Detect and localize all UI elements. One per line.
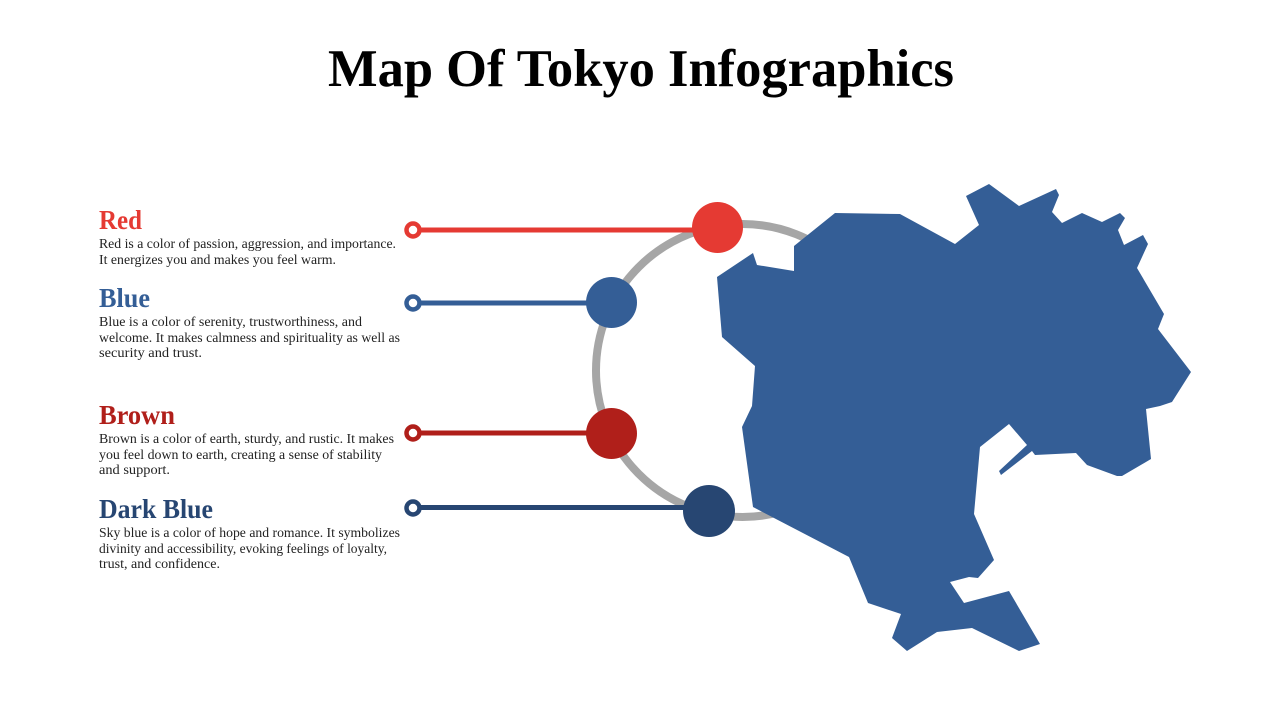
text block: brown: you feel down to earth, creating a sense of stability bbox=[99, 448, 382, 463]
text block: brown: and support. bbox=[99, 463, 170, 478]
text block: dark blue: Dark Blue bbox=[99, 494, 213, 524]
connector: blue bbox=[406, 277, 637, 328]
text block: red: It energizes you and makes you feel warm. bbox=[99, 253, 336, 268]
connector: brown bbox=[406, 408, 637, 459]
title: Map Of Tokyo Infographics bbox=[328, 40, 954, 98]
text block: dark blue bbox=[99, 494, 400, 572]
text block: blue bbox=[99, 283, 400, 361]
connector: red bbox=[406, 202, 743, 253]
map of Tokyo bbox=[717, 184, 1191, 651]
text block: blue: Blue is a color of serenity, trustworthiness, and bbox=[99, 315, 362, 330]
ring bbox=[596, 224, 889, 517]
text block: brown: Brown bbox=[99, 400, 175, 430]
text block: dark blue: trust, and confidence. bbox=[99, 557, 220, 572]
text block: red bbox=[99, 205, 396, 268]
text block: brown bbox=[99, 400, 394, 478]
text block: red: Red is a color of passion, aggression, and importance. bbox=[99, 237, 396, 252]
text block: brown: Brown is a color of earth, sturdy, and rustic. It makes bbox=[99, 432, 394, 447]
text block: dark blue: divinity and accessibility, evoking feelings of loyalty, bbox=[99, 542, 387, 557]
text block: red: Red bbox=[99, 205, 142, 235]
connector: dark blue bbox=[406, 485, 735, 537]
text block: blue: Blue bbox=[99, 283, 150, 313]
text block: blue: security and trust. bbox=[99, 346, 202, 361]
text block: dark blue: Sky blue is a color of hope and romance. It symbolizes bbox=[99, 526, 400, 541]
text block: blue: welcome. It makes calmness and spirituality as well as bbox=[99, 331, 400, 346]
